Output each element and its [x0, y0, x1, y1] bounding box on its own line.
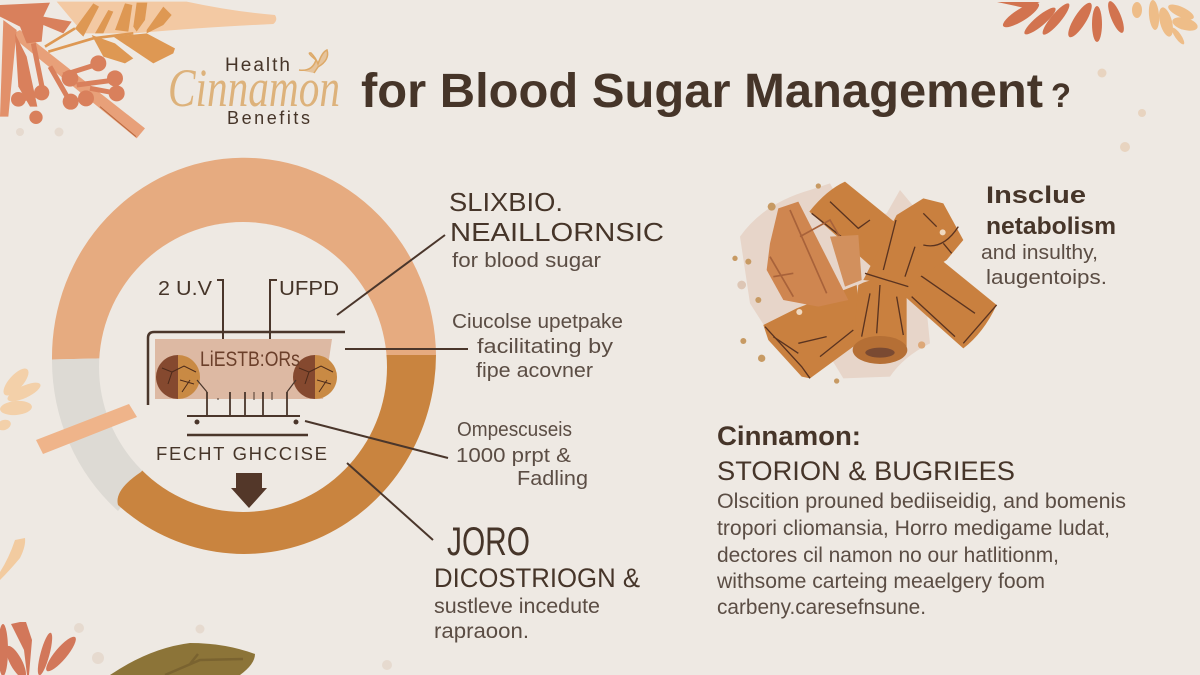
transport rods and base — [187, 380, 308, 435]
callout: SLIXBIO: NEAILLORNSIC — [450, 217, 664, 247]
text block: Cinnamon: Cinnamon: — [717, 421, 861, 451]
callout: glucose uptake — [452, 311, 623, 382]
arrow: down — [231, 473, 267, 508]
text block: Cinnamon: withsome carteing meaelgery foom — [716, 570, 1045, 593]
arrow: left down — [217, 280, 227, 346]
icon: left cell — [156, 355, 200, 399]
callout: Ompescuseis: Ompescuseis — [457, 419, 572, 441]
crushed bark — [767, 202, 862, 315]
title: for Blood Sugar Management — [361, 65, 1043, 118]
decoration: bottom olive leaf — [110, 643, 255, 675]
text block: Cinnamon: carbeny.caresefnsune. — [717, 596, 926, 619]
decoration: top-left botanical sprig — [0, 2, 276, 138]
callout: SLIXBIO: SLIXBIO. — [449, 187, 563, 217]
stick: front — [853, 273, 908, 364]
panel label: LiESTB:ORs — [200, 348, 300, 371]
leader lines — [305, 235, 468, 540]
logo: Health Cinnamon Benefits — [168, 50, 340, 128]
text block: Cinnamon — [716, 421, 1126, 619]
label: FECHT GHCCISE: FECHT GHCCISE — [156, 443, 327, 464]
illustration: cinnamon sticks — [732, 182, 997, 384]
decoration: left mid leaf — [0, 365, 43, 432]
callout: JORO — [434, 520, 640, 643]
title question mark: ? — [1051, 77, 1071, 115]
callout: Ompescuseis — [456, 419, 588, 490]
callout: Ompescuseis: Fadling — [517, 468, 588, 490]
callout: glucose uptake: fipe acovner — [476, 360, 593, 382]
logo: Health Cinnamon Benefits: Benefits — [227, 108, 310, 128]
callout: metabolism: laugentoips. — [986, 267, 1107, 289]
central diagram — [148, 278, 345, 508]
icon: right cell — [293, 355, 337, 399]
callout: metabolism: netabolism — [986, 213, 1116, 240]
ring segment: grey — [52, 355, 243, 511]
arrow: right down — [266, 280, 277, 346]
callout: glucose uptake: facilitating by — [477, 336, 613, 358]
callout: JORO: rapraoon. — [434, 620, 529, 643]
label: UFPD: UFPD — [279, 278, 339, 300]
spice specks — [732, 183, 925, 384]
text block: Cinnamon: dectores cil namon no our hatlitionm, — [717, 544, 1059, 567]
stick: long diagonal — [809, 182, 997, 348]
logo: Health Cinnamon Benefits: Health — [225, 55, 290, 76]
frame line — [148, 332, 345, 405]
text block: Cinnamon: STORION & BUGRIEES — [717, 456, 1015, 486]
callout: JORO: DICOSTRIOGN & — [434, 563, 640, 593]
text block: Cinnamon: tropori cliomansia, Horro medigame ludat, — [717, 517, 1110, 540]
callout: JORO: JORO — [447, 520, 530, 564]
callout: metabolism — [981, 182, 1116, 289]
callout: glucose uptake: Ciucolse upetpake — [452, 311, 623, 333]
text block: Cinnamon: Olscition prouned bediiseidig, and bomenis — [717, 490, 1126, 513]
powder background — [740, 183, 930, 378]
decoration: bottom-left leaves — [0, 622, 80, 675]
peach bar across ring — [36, 404, 137, 454]
stick: lower left — [763, 285, 862, 378]
ring segment: dark orange — [117, 355, 436, 554]
stick: upper right — [863, 198, 963, 285]
callout: SLIXBIO: for blood sugar — [452, 250, 601, 272]
ring segment: peach — [52, 158, 436, 360]
ring chart — [52, 158, 436, 554]
callout: Ompescuseis: 1000 prpt & — [456, 445, 572, 467]
base dots — [194, 420, 298, 424]
callout: metabolism: Insclue — [986, 182, 1086, 209]
callout: SLIXBIO — [449, 187, 664, 272]
ring centre — [99, 222, 387, 512]
decoration: top-right leaves — [997, 0, 1199, 46]
logo: Health Cinnamon Benefits: Cinnamon — [168, 58, 340, 118]
callout: JORO: sustleve incedute — [434, 595, 600, 618]
decoration: left lower leaf — [0, 538, 25, 580]
label: 2 U.V: 2 U.V — [158, 278, 213, 300]
peach panel — [155, 339, 332, 399]
callout: metabolism: and insulthy, — [981, 242, 1098, 264]
